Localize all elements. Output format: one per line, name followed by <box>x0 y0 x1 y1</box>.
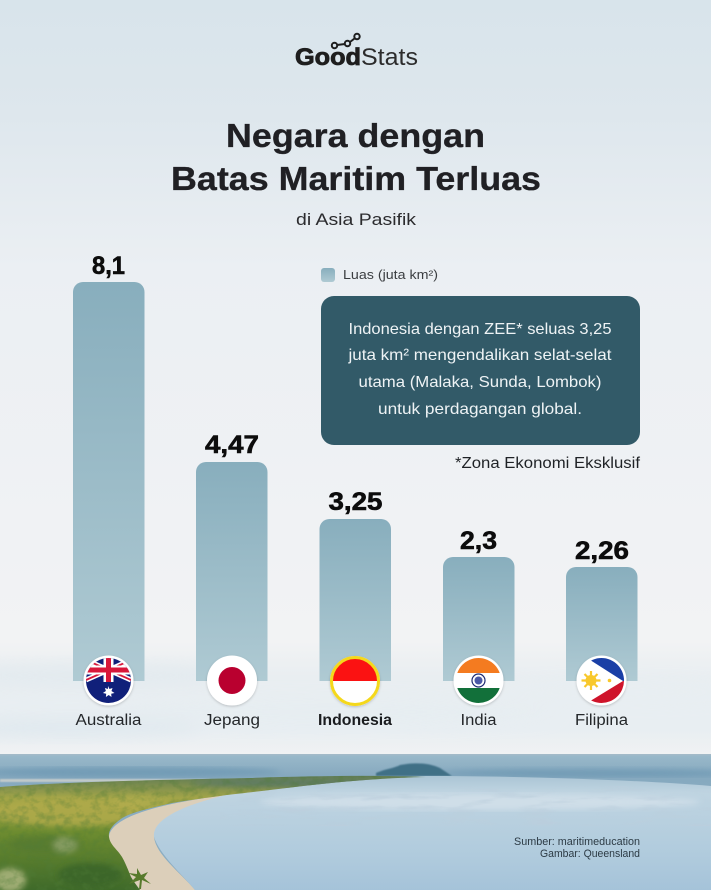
source credits: Sumber: maritimeducation <box>514 836 640 848</box>
bar: Jepang <box>196 431 268 681</box>
logo chart line icon <box>332 34 360 48</box>
palm <box>128 868 151 889</box>
icon: flag Australia <box>84 656 134 706</box>
bar: Filipina: 2,26 <box>575 537 629 565</box>
bar: Australia <box>73 252 144 681</box>
bar: India <box>443 527 514 681</box>
logo: GoodStats: Good <box>295 44 361 71</box>
forest <box>0 775 430 890</box>
cloud layer <box>0 663 711 737</box>
footnote: *Zona Ekonomi Eksklusif <box>455 455 641 472</box>
far sea <box>0 755 711 890</box>
logo: GoodStats: Stats <box>361 44 418 71</box>
country labels: Jepang <box>204 712 260 729</box>
bar: Indonesia: 3,25 <box>328 488 383 516</box>
headland <box>376 763 452 776</box>
source credits: Gambar: Queensland <box>540 848 640 860</box>
icon: flag Jepang <box>207 656 257 706</box>
country labels: Australia <box>76 712 142 729</box>
bar: Filipina <box>566 537 638 681</box>
country labels: Filipina <box>575 712 628 729</box>
sun <box>582 671 600 690</box>
bar: Jepang: 4,47 <box>205 431 259 459</box>
subtitle: di Asia Pasifik <box>296 210 417 229</box>
source credits <box>514 836 640 860</box>
title: Batas Maritim Terluas <box>171 160 541 197</box>
country labels: India <box>460 712 497 729</box>
country labels: Indonesia <box>318 712 392 729</box>
bar chart <box>73 252 638 681</box>
bar: India: 2,3 <box>460 527 497 555</box>
bay <box>150 775 711 890</box>
title <box>171 117 541 197</box>
bar: Indonesia <box>320 488 391 681</box>
icon: flag Filipina <box>576 656 626 706</box>
beach <box>109 777 426 890</box>
callout: untuk perdagangan global. <box>378 401 582 418</box>
logo: GoodStats <box>295 34 418 71</box>
callout <box>321 296 640 445</box>
legend: Luas (juta km²) <box>343 267 438 282</box>
callout: Indonesia dengan ZEE* seluas 3,25 <box>348 321 612 338</box>
callout: juta km² mengendalikan selat-selat <box>347 347 612 364</box>
icon: flag India <box>454 656 504 706</box>
country labels <box>76 712 628 729</box>
icon: flag Indonesia <box>330 656 380 706</box>
photo: coastline <box>0 754 711 890</box>
title: Negara dengan <box>226 117 485 154</box>
bar: Australia: 8,1 <box>92 252 125 280</box>
callout: utama (Malaka, Sunda, Lombok) <box>358 374 602 391</box>
